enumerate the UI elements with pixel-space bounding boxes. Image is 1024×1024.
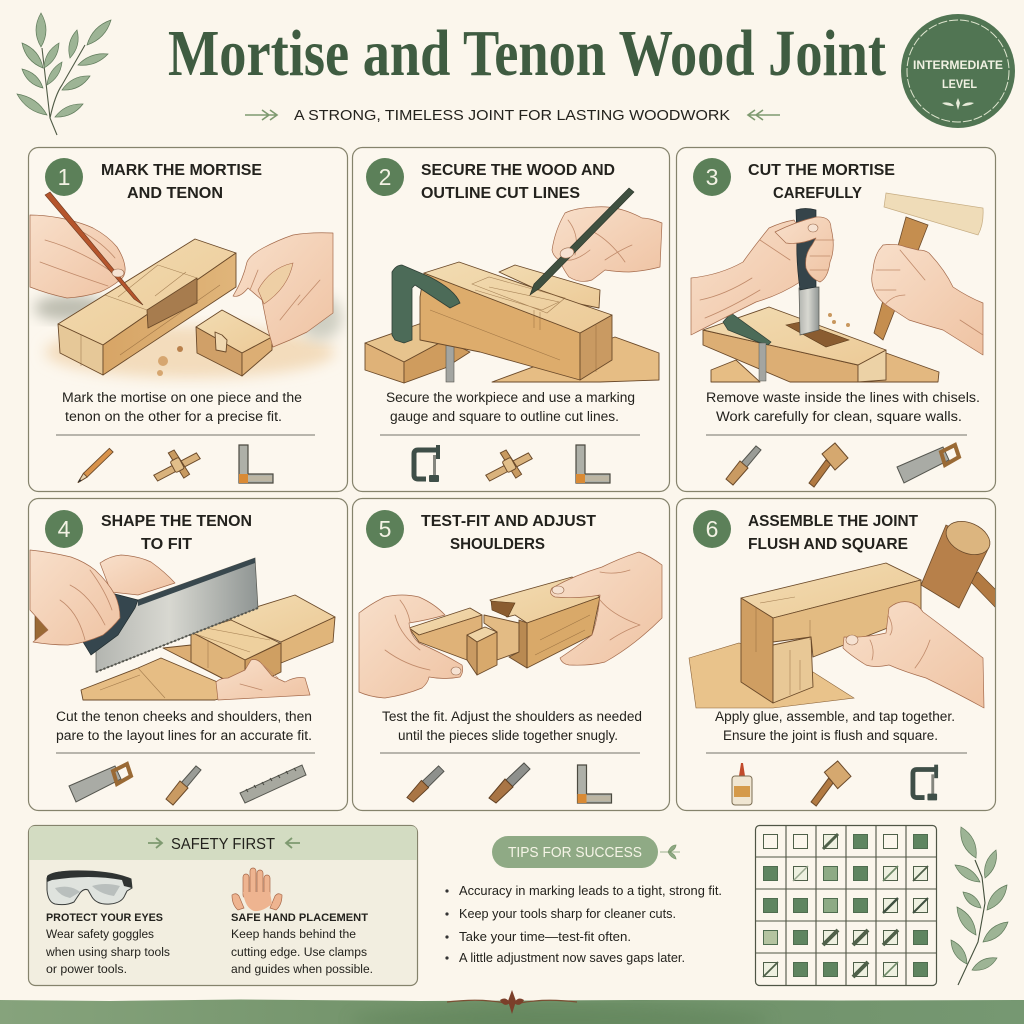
safe hand placement text: SAFE HAND PLACEMENT [231, 912, 368, 924]
panel 5: test-fit [352, 498, 670, 810]
icon: clamp [913, 765, 938, 800]
step 5 tools [407, 763, 612, 803]
panel 2: secure the wood [352, 148, 670, 492]
step 1 heading [101, 162, 262, 202]
step 2 heading [421, 162, 615, 202]
icon: mallet [809, 443, 848, 487]
panel 3: cut the mortise [676, 148, 996, 492]
icon: chisel [726, 446, 761, 485]
safe hand placement text: Keep hands behind the [231, 927, 356, 941]
tips list: A little adjustment now saves gaps later. [459, 950, 685, 965]
step 5 heading [421, 513, 597, 553]
step 1 description [62, 390, 302, 424]
step 4 heading: SHAPE THE TENON [101, 513, 252, 530]
icon: clamp [414, 445, 440, 482]
step 1 illustration [30, 192, 342, 378]
joint pattern grid [755, 825, 937, 986]
step 4 description: Cut the tenon cheeks and shoulders, then [56, 709, 312, 724]
badge: intermediate level: LEVEL [942, 77, 977, 91]
tips list: Take your time—test-fit often. [459, 929, 631, 944]
protect your eyes text: PROTECT YOUR EYES [46, 912, 163, 924]
step 2 number [366, 158, 404, 196]
step 3 description [706, 390, 980, 424]
icon: paring chisel [489, 763, 530, 803]
step 3 heading: CUT THE MORTISE [748, 162, 895, 179]
step 3 number: 3 [706, 164, 718, 190]
icon: chisel [166, 766, 201, 805]
step 6 number: 6 [706, 516, 718, 542]
panel 1: mark the mortise and tenon [28, 148, 348, 492]
step 1 description: tenon on the other for a precise fit. [65, 409, 282, 424]
panel 4: shape the tenon [28, 498, 348, 810]
step 1 tools [78, 445, 273, 483]
icon: ruler [240, 765, 306, 803]
step 2 heading: OUTLINE CUT LINES [421, 185, 580, 202]
step 5 heading: TEST-FIT AND ADJUST [421, 513, 597, 530]
panel: safety first [28, 826, 418, 986]
safe hand placement text: cutting edge. Use clamps [231, 945, 367, 959]
step 5 description [382, 709, 642, 743]
step 3 heading: CAREFULLY [773, 185, 863, 202]
step 5 description: Test the fit. Adjust the shoulders as needed [382, 709, 642, 724]
decorative sprig bottom right [951, 827, 1008, 985]
grid row 1 [764, 834, 928, 849]
icon: glue bottle [732, 763, 752, 805]
badge: intermediate level [901, 14, 1015, 128]
step 5 description: until the pieces slide together snugly. [398, 728, 618, 743]
icon: pencil [78, 448, 113, 483]
protect your eyes text: when using sharp tools [45, 945, 170, 959]
icon: saw [897, 445, 959, 483]
step 1 heading: MARK THE MORTISE [101, 162, 262, 179]
step 1 number [45, 158, 83, 196]
step 6 heading [748, 513, 919, 553]
step 2 number: 2 [379, 164, 391, 190]
step 6 description: Ensure the joint is flush and square. [723, 728, 938, 743]
step 4 tools [69, 764, 306, 805]
icon: chisel [407, 766, 444, 802]
step 3 tools [726, 443, 959, 487]
grid row 2 [764, 866, 928, 881]
step 2 description [386, 390, 635, 424]
protect your eyes text: Wear safety goggles [46, 927, 154, 941]
step 4 number: 4 [58, 516, 71, 542]
tips pill: TIPS FOR SUCCESS [508, 845, 642, 861]
panel 6: assemble [676, 498, 996, 810]
icon: mallet [811, 761, 851, 806]
tips for success [445, 836, 722, 965]
tips pill [492, 836, 680, 868]
step 4 illustration [30, 550, 335, 700]
tips list [445, 883, 722, 965]
step 2 description: Secure the workpiece and use a marking [386, 390, 635, 405]
step 4 heading: TO FIT [141, 536, 193, 553]
step 2 tools [414, 445, 610, 483]
protect your eyes text [45, 912, 170, 976]
grid row 5 [763, 962, 928, 977]
step 6 number [693, 510, 731, 548]
step 3 illustration [691, 193, 983, 382]
step 2 heading: SECURE THE WOOD AND [421, 162, 615, 179]
step 6 description: Apply glue, assemble, and tap together. [715, 709, 955, 724]
step 1 number: 1 [58, 164, 70, 190]
step 5 heading: SHOULDERS [450, 536, 545, 553]
step 4 description [56, 709, 312, 743]
step 6 illustration [689, 515, 996, 708]
step 2 description: gauge and square to outline cut lines. [390, 409, 619, 424]
step 5 illustration [359, 552, 662, 698]
step 6 tools [732, 761, 938, 806]
step 4 heading [101, 513, 252, 553]
title: Mortise and Tenon Wood Joint [168, 17, 886, 90]
step 1 description: Mark the mortise on one piece and the [62, 390, 302, 405]
protect your eyes text: or power tools. [46, 962, 127, 976]
step 3 description: Remove waste inside the lines with chisels. [706, 390, 980, 405]
decorative sprig top left [17, 13, 111, 135]
icon: saw [69, 764, 131, 802]
step 6 description [715, 709, 955, 743]
step 3 heading [748, 162, 895, 202]
step 1 heading: AND TENON [127, 185, 223, 202]
step 6 heading: ASSEMBLE THE JOINT [748, 513, 919, 530]
tips list: Accuracy in marking leads to a tight, strong fit. [459, 883, 722, 898]
footer band [0, 990, 1024, 1024]
icon: square [578, 765, 612, 803]
subtitle: A STRONG, TIMELESS JOINT FOR LASTING WOODWORK [294, 108, 730, 124]
icon: marking gauge [486, 450, 532, 481]
icon: square [576, 445, 610, 483]
step 2 illustration [365, 188, 662, 383]
badge: intermediate level: INTERMEDIATE [913, 58, 1003, 72]
step 4 description: pare to the layout lines for an accurate fit. [56, 728, 312, 743]
safe hand placement text: and guides when possible. [231, 962, 373, 976]
step 5 number: 5 [379, 516, 391, 542]
icon: raised hand [232, 868, 282, 911]
step 6 heading: FLUSH AND SQUARE [748, 536, 908, 553]
safe hand placement text [231, 912, 373, 976]
step 5 number [366, 510, 404, 548]
icon: goggles [47, 871, 132, 905]
grid row 3 [764, 898, 928, 913]
footer ornament [447, 990, 577, 1014]
step 3 description: Work carefully for clean, square walls. [716, 409, 962, 424]
icon: marking gauge [154, 450, 200, 481]
step 3 number [693, 158, 731, 196]
icon: square [239, 445, 273, 483]
step 4 number [45, 510, 83, 548]
grid row 4 [764, 930, 928, 945]
safety heading: SAFETY FIRST [171, 836, 276, 853]
tips list: Keep your tools sharp for cleaner cuts. [459, 906, 676, 921]
